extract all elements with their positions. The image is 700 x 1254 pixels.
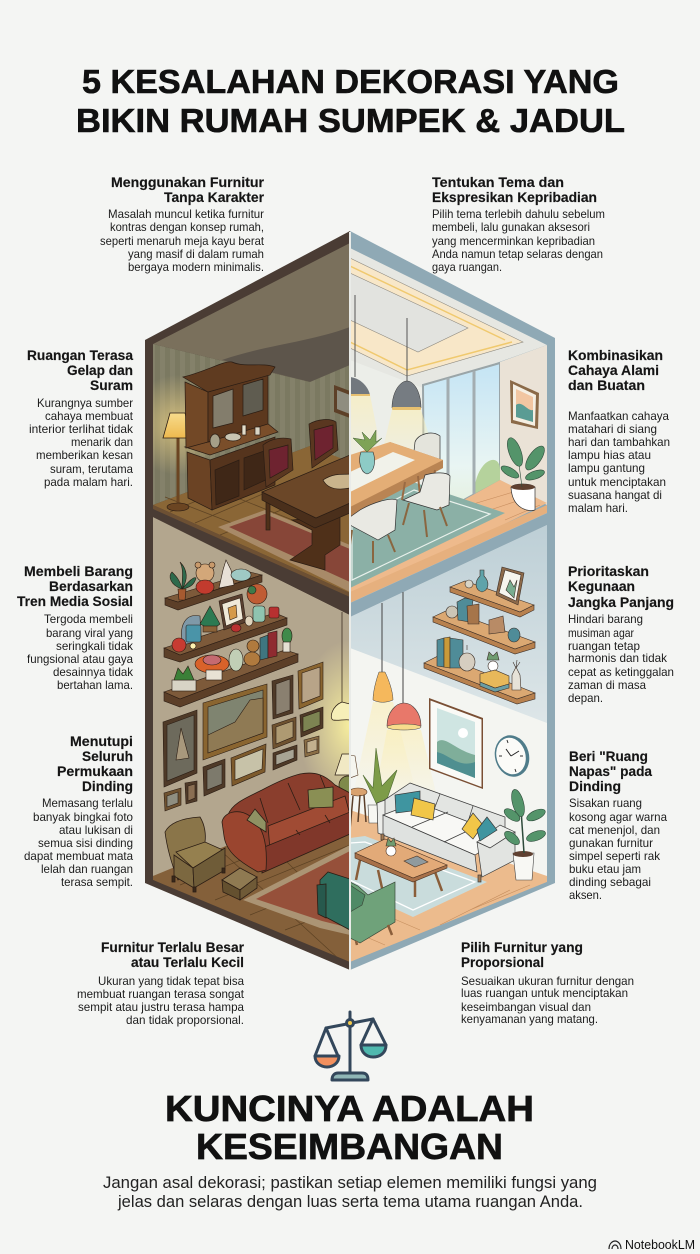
text block: tren media sosial: fungsional atau gaya: [27, 652, 133, 666]
shelf items: [178, 589, 186, 600]
text block: ruang napas: gunakan furnitur: [569, 836, 653, 850]
text block: kombinasikan cahaya: Cahaya Alami: [568, 363, 659, 378]
text block: menutupi dinding: semua sisi dinding: [38, 836, 133, 850]
watermark: NotebookLM: NotebookLM: [625, 1238, 695, 1252]
text block: menutupi dinding: lelah dan ruangan: [41, 862, 133, 876]
center divider: [349, 232, 351, 970]
wall lower left: [153, 517, 350, 876]
text block: ruang napas: [569, 749, 667, 902]
text block: ruangan gelap: Suram: [90, 378, 133, 393]
text block: ruang napas: Napas" pada: [569, 764, 652, 779]
text block: ruangan gelap: cahaya membuat: [45, 409, 134, 423]
wall frame: [334, 385, 350, 418]
side table: [349, 755, 367, 830]
text block: tren media sosial: seringkali tidak: [56, 639, 134, 653]
coffee table: [355, 838, 447, 897]
text block: kombinasikan cahaya: suasana hangat di: [568, 488, 662, 502]
text block: prioritaskan kegunaan: cepat as ketinggalan: [568, 665, 674, 679]
window: [422, 362, 500, 500]
panel: dark frame left: [145, 231, 350, 970]
closing heading: KESEIMBANGAN: [196, 1126, 503, 1167]
ottoman: [222, 868, 257, 900]
text block: menutupi dinding: Dinding: [82, 779, 133, 794]
text block: prioritaskan kegunaan: Kegunaan: [568, 579, 635, 594]
text block: furnitur tanpa karakter: Menggunakan Furnitur: [111, 175, 265, 190]
text block: tentukan tema: Pilih tema terlebih dahulu sebelum: [432, 207, 605, 221]
text block: prioritaskan kegunaan: [568, 564, 674, 705]
dining table: [262, 455, 350, 570]
armchair: [165, 817, 225, 892]
text block: kombinasikan cahaya: hari dan tambahkan: [568, 435, 670, 449]
text block: kombinasikan cahaya: matahari di siang: [568, 422, 657, 436]
text block: ruang napas: buku etau jam: [569, 862, 641, 876]
title: [76, 63, 625, 139]
plant by wall: [499, 436, 548, 511]
rug: [218, 510, 350, 592]
text block: menutupi dinding: Menutupi: [70, 734, 133, 749]
text block: tentukan tema: Ekspresikan Kepribadian: [432, 190, 597, 205]
text block: ruang napas: dinding sebagai: [569, 875, 651, 889]
text block: tentukan tema: Anda namun tetap selaras dengan: [432, 247, 603, 261]
text block: ruangan gelap: pada malam hari.: [44, 475, 133, 489]
text block: pilih furnitur: [461, 940, 634, 1026]
wall lower right: [350, 513, 547, 880]
text block: ruang napas: simpel seperti rak: [569, 849, 661, 863]
panel: dark dining room: [153, 244, 349, 962]
pendant lamps lower right: [352, 592, 440, 810]
text block: ruang napas: aksen.: [569, 888, 602, 902]
text block: ruang napas: Beri "Ruang: [569, 749, 648, 764]
text block: ruangan gelap: Ruangan Terasa: [27, 348, 133, 363]
vase and plant: [353, 430, 382, 474]
text block: furnitur tanpa karakter: bergaya modern minimalis.: [128, 260, 264, 274]
text block: prioritaskan kegunaan: musiman agar: [568, 626, 634, 640]
plant right: [502, 788, 547, 880]
text block: tren media sosial: desainnya tidak: [53, 665, 134, 679]
red sofa: [222, 773, 350, 873]
text block: furnitur tanpa karakter: yang masif di dalam rumah: [128, 247, 264, 261]
text block: tentukan tema: [432, 175, 605, 274]
text block: tren media sosial: barang viral yang: [46, 626, 133, 640]
text block: pilih furnitur: Pilih Furnitur yang: [461, 940, 583, 955]
text block: pilih furnitur: kenyamanan yang matang.: [461, 1012, 598, 1026]
text block: menutupi dinding: banyak bingkai foto: [33, 810, 133, 824]
shelf objects: [476, 570, 488, 592]
text block: furnitur tanpa karakter: seperti menaruh meja kayu berat: [100, 234, 265, 248]
text block: kombinasikan cahaya: malam hari.: [568, 501, 628, 515]
text block: kombinasikan cahaya: lampu gantung: [568, 461, 645, 475]
text block: tentukan tema: Tentukan Tema dan: [432, 175, 564, 190]
text block: prioritaskan kegunaan: harmonis dan tidak: [568, 651, 668, 665]
text block: tentukan tema: gaya ruangan.: [432, 260, 502, 274]
text block: furnitur terlalu besar: Furnitur Terlalu Besar: [101, 940, 245, 955]
text block: furnitur terlalu besar: [77, 940, 245, 1027]
text block: furnitur tanpa karakter: [100, 175, 265, 274]
text block: kombinasikan cahaya: Manfaatkan cahaya: [568, 409, 669, 423]
text block: ruang napas: cat menenjol, dan: [569, 823, 660, 837]
floor lower left: [153, 835, 349, 962]
pendant and table lamp: [330, 612, 349, 792]
text block: prioritaskan kegunaan: Prioritaskan: [568, 564, 649, 579]
text block: tren media sosial: Berdasarkan: [49, 579, 133, 594]
framed picture: [510, 380, 539, 429]
text block: menutupi dinding: Memasang terlalu: [42, 796, 133, 810]
wood beam: [350, 505, 547, 603]
text block: menutupi dinding: terasa sempit.: [61, 875, 133, 889]
dining table light: [350, 442, 443, 517]
light rug: [350, 836, 487, 917]
bright ceiling: [350, 241, 547, 392]
text block: furnitur terlalu besar: dan tidak proporsional.: [126, 1013, 244, 1027]
floor lamp: [163, 413, 192, 511]
light cones: [351, 396, 380, 450]
teal rug: [350, 482, 505, 588]
title: BIKIN RUMAH SUMPEK & JADUL: [76, 102, 625, 139]
text block: ruang napas: kosong agar warna: [569, 810, 667, 824]
text block: ruangan gelap: [27, 348, 134, 489]
green armchair: [317, 872, 350, 930]
text block: kombinasikan cahaya: Kombinasikan: [568, 348, 663, 363]
text block: furnitur terlalu besar: Ukuran yang tidak tepat bisa: [98, 974, 244, 988]
text block: menutupi dinding: atau lukisan di: [59, 823, 133, 837]
text block: tentukan tema: yang mencerminkan kepribadian: [432, 234, 595, 248]
text block: furnitur terlalu besar: membuat ruangan terasa songat: [77, 987, 245, 1001]
closing heading: KUNCINYA ADALAH: [165, 1088, 534, 1129]
text block: furnitur tanpa karakter: kontras dengan konsep rumah,: [110, 220, 264, 234]
rug lower left: [243, 845, 350, 935]
panel: light frame right: [350, 231, 555, 970]
text block: prioritaskan kegunaan: depan.: [568, 691, 603, 705]
text block: ruangan gelap: Gelap dan: [67, 363, 133, 378]
text block: pilih furnitur: keseimbangan visual dan: [461, 1000, 591, 1014]
text block: furnitur tanpa karakter: Masalah muncul ketika furnitur: [108, 207, 264, 221]
gallery wall: [163, 662, 323, 811]
white sofa: [377, 783, 515, 882]
floor lower right: [350, 810, 547, 962]
text block: prioritaskan kegunaan: Hindari barang: [568, 612, 643, 626]
closing text: jelas dan selaras dengan luas serta tema utama ruangan Anda.: [117, 1193, 583, 1211]
text block: menutupi dinding: dapat membuat mata: [24, 849, 133, 863]
text block: tentukan tema: membeli, lalu gunakan aksesori: [432, 220, 590, 234]
text block: menutupi dinding: Permukaan: [57, 764, 133, 779]
text block: tren media sosial: [17, 564, 134, 692]
back chair: [414, 432, 440, 459]
title: 5 KESALAHAN DEKORASI YANG: [82, 63, 619, 100]
closing heading: [165, 1088, 534, 1167]
text block: prioritaskan kegunaan: ruangan tetap: [568, 639, 640, 653]
text block: ruangan gelap: suram, terutama: [50, 462, 133, 476]
text block: prioritaskan kegunaan: Jangka Panjang: [568, 595, 674, 610]
floating beam: [153, 505, 350, 615]
plant left: [363, 748, 397, 823]
wall clock: [490, 731, 534, 781]
beige wall: [500, 345, 547, 505]
text block: ruangan gelap: Kurangnya sumber: [37, 396, 133, 410]
antique cabinet: [183, 362, 278, 510]
text block: kombinasikan cahaya: dan Buatan: [568, 378, 645, 393]
house cross-section: [128, 231, 555, 970]
text block: tren media sosial: Membeli Barang: [24, 564, 133, 579]
text block: kombinasikan cahaya: [568, 348, 670, 515]
panel: bright room: [349, 241, 548, 962]
shelves left: [164, 560, 298, 707]
landscape picture: [429, 698, 483, 789]
floor upper right: [350, 480, 547, 600]
pendant lights dining: [350, 295, 421, 410]
text block: menutupi dinding: Seluruh: [82, 749, 133, 764]
text block: tren media sosial: Tergoda membeli: [44, 612, 133, 626]
text block: ruangan gelap: menarik dan: [71, 435, 133, 449]
text block: prioritaskan kegunaan: zaman di masa: [568, 678, 646, 692]
text block: ruangan gelap: interior terlihat tidak: [29, 422, 134, 436]
closing text: Jangan asal dekorasi; pastikan setiap elemen memiliki fungsi yang: [103, 1174, 597, 1192]
text block: pilih furnitur: Proporsional: [461, 955, 544, 970]
text block: furnitur terlalu besar: sempit atau justru terasa hampa: [78, 1000, 244, 1014]
text block: furnitur tanpa karakter: Tanpa Karakter: [164, 190, 265, 205]
white chairs: [350, 473, 450, 563]
text block: pilih furnitur: luas ruangan untuk menciptakan: [461, 986, 628, 1000]
text block: ruang napas: Sisakan ruang: [569, 796, 642, 810]
shelves right: [424, 567, 535, 704]
text block: menutupi dinding: [24, 734, 133, 889]
text block: kombinasikan cahaya: lampu hias atau: [568, 448, 651, 462]
green armchair right: [350, 882, 395, 945]
wall back: [351, 362, 423, 485]
dining chairs: [263, 420, 338, 487]
closing text: [103, 1174, 597, 1211]
icon: balance scale: [315, 1012, 386, 1080]
text block: furnitur terlalu besar: atau Terlalu Kecil: [131, 955, 244, 970]
text block: tren media sosial: Tren Media Sosial: [17, 594, 133, 609]
text block: ruangan gelap: memberikan kesan: [36, 448, 133, 462]
text block: ruang napas: Dinding: [569, 779, 621, 794]
text block: kombinasikan cahaya: untuk menciptakan: [568, 475, 666, 489]
text block: tren media sosial: bertahan lama.: [57, 678, 133, 692]
text block: pilih furnitur: Sesuaikan ukuran furnitur dengan: [461, 974, 634, 988]
